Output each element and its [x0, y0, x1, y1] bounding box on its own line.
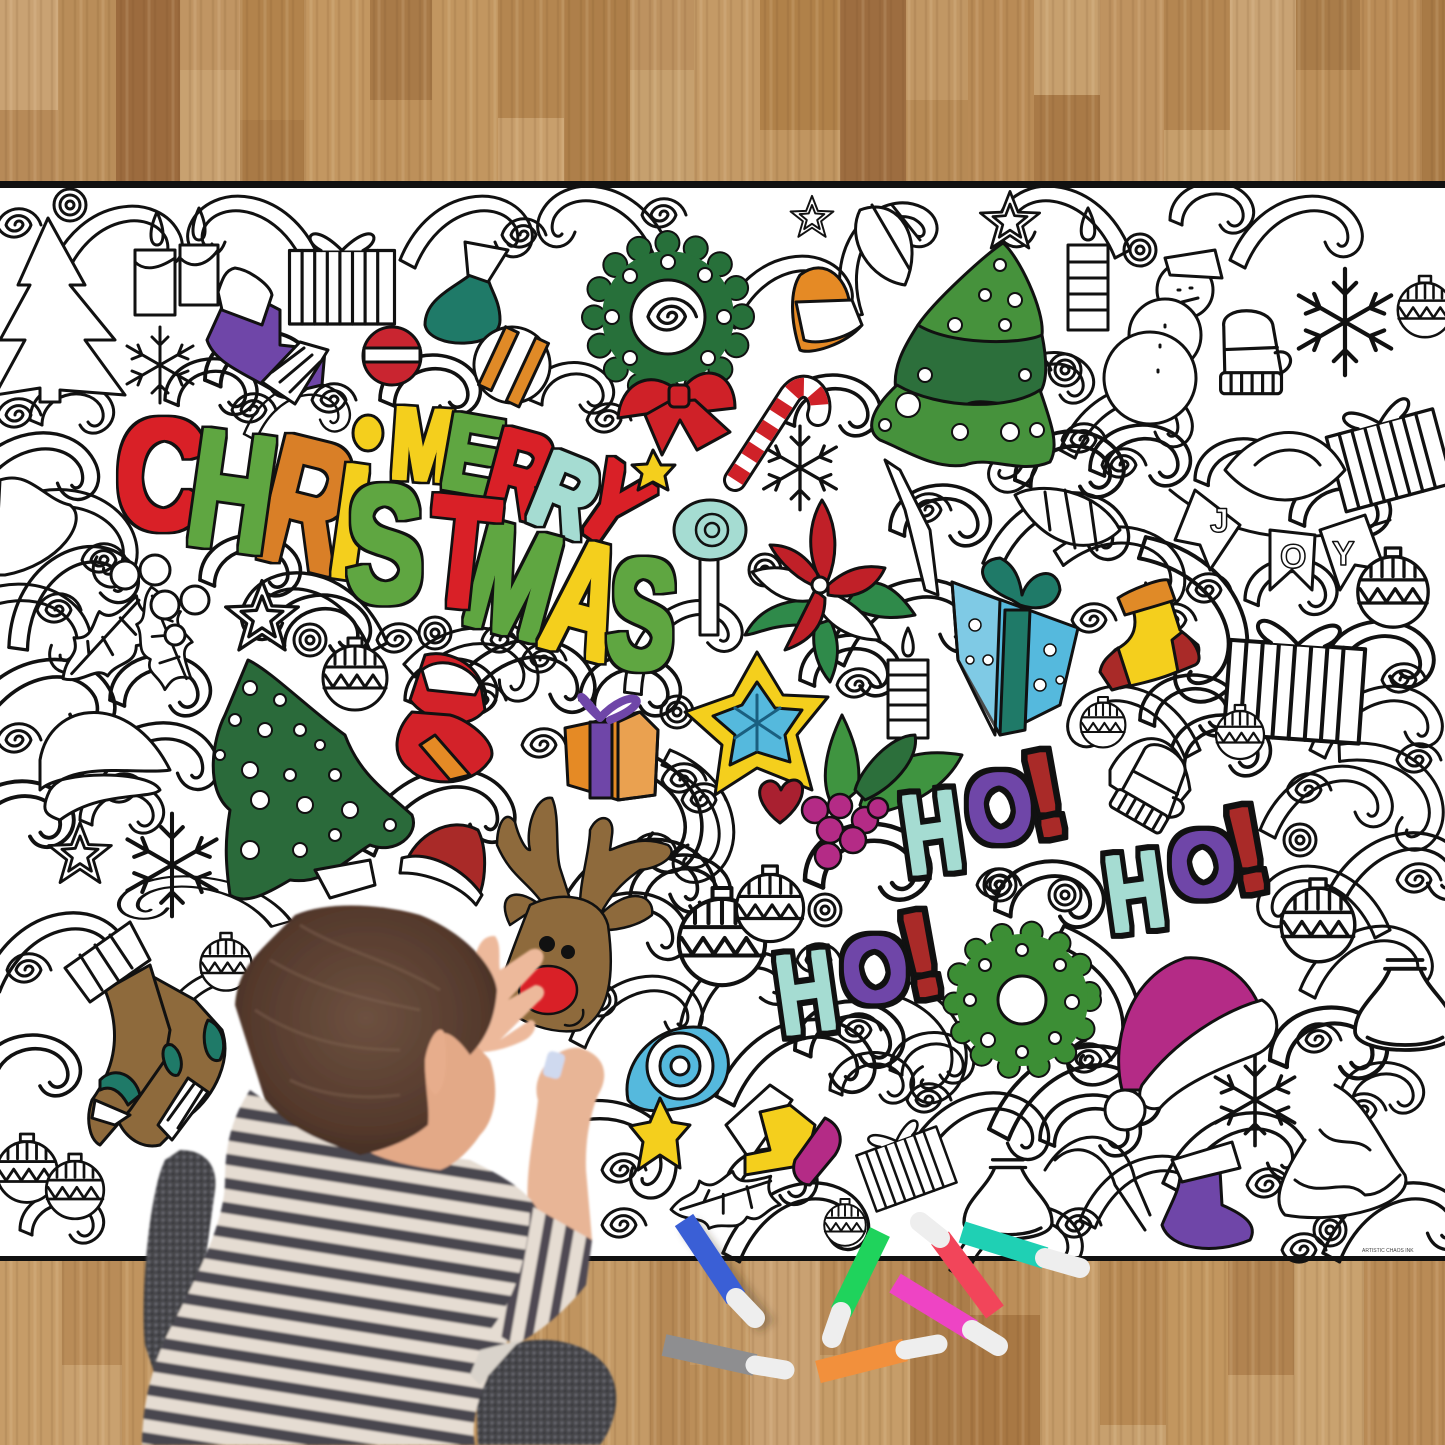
icon: ornament right: [1358, 548, 1428, 627]
right hand and arm: [527, 1048, 604, 1240]
icon: outline gift bottom: [852, 1114, 957, 1211]
title: Merry Christmas lettering: [111, 386, 683, 704]
icon: white mitten under tree: [315, 860, 375, 898]
markers group: [664, 1220, 1080, 1372]
icon: teal gift: [952, 558, 1078, 735]
word: CHRISTMAS: H: [178, 395, 286, 589]
lettering: HO centre: [894, 725, 1078, 900]
icon: poinsettia: [745, 500, 915, 682]
icon: outline gift mid right: [1224, 619, 1367, 744]
icon: yellow blue star: [685, 652, 828, 795]
icon: bag: [964, 1160, 1052, 1239]
credit line: ARTISTIC CHAOS INK: [1362, 1248, 1414, 1254]
marker: teal: [962, 1232, 1080, 1268]
word: MERRY: Y: [555, 441, 668, 569]
icon: magenta santa hat: [1105, 958, 1277, 1130]
icon: red heart: [760, 780, 803, 823]
lettering: HO right: !: [1213, 780, 1280, 919]
word: MERRY: R: [475, 405, 565, 546]
neck and face: [340, 1027, 495, 1170]
icon: star top: [791, 196, 833, 237]
hair strands: [255, 925, 440, 1097]
icon: outline gift right: [1322, 392, 1445, 512]
icon: santa hat outline: [40, 712, 170, 820]
icon: candy cane outline: [1045, 1137, 1150, 1230]
marker in hand: [542, 1050, 566, 1080]
icon: red mittens: [397, 654, 492, 782]
icon: candy cane: [735, 387, 819, 480]
icon: green tree top: [872, 243, 1054, 467]
lettering: HO centre: O: [960, 750, 1040, 866]
poster sheet: [0, 181, 1445, 1261]
shirt sleeve: [490, 1205, 592, 1345]
word: CHRISTMAS: S: [347, 453, 423, 637]
icon: outline tree: [1279, 1085, 1406, 1218]
lettering: HO bottom: !: [887, 885, 954, 1024]
shirt torso: [142, 1090, 540, 1445]
undershirt patch: [470, 1340, 520, 1385]
icon: snowflake: [127, 814, 217, 916]
icon: ornament top right: [1398, 276, 1445, 337]
icon: purple stocking: [1162, 1142, 1252, 1248]
icon: orange gift: [565, 697, 658, 800]
word: CHRISTMAS: I: [321, 430, 379, 612]
icon: holly vertical: [133, 584, 196, 692]
icon: yellow star bottom: [630, 1098, 690, 1170]
lettering: HO bottom: [768, 885, 954, 1060]
icon: holly and berries: [802, 715, 962, 869]
banner letter Y: Y: [1332, 535, 1355, 573]
marker: pink: [895, 1283, 998, 1346]
icon: snowflake bottom: [1215, 1054, 1295, 1146]
word: HO HO HO lettering: [768, 725, 1280, 1060]
icon: outline pine tree: [0, 218, 125, 402]
icon: shell: [1015, 488, 1120, 550]
icon: holly left: [43, 587, 173, 696]
word: CHRISTMAS: A: [529, 504, 642, 694]
icon: star top right: [980, 191, 1040, 248]
marker: green: [832, 1232, 880, 1338]
banner text: J: [1210, 502, 1229, 540]
icon: red bow: [618, 373, 735, 455]
icon: orange bell: [792, 268, 862, 351]
icon: heart cookie: [0, 478, 76, 575]
word: CHRISTMAS: R: [243, 397, 372, 611]
icon: outline star: [226, 581, 298, 650]
word: MERRY: R: [516, 429, 615, 560]
icon: ornament mitten: [200, 933, 252, 991]
lettering: HO right: [1098, 780, 1280, 957]
icon: yellow stocking: [1100, 580, 1199, 690]
icon: ornament bottom middle: [679, 888, 765, 985]
icon: star left: [49, 823, 111, 883]
icon: rocket outline: [885, 460, 938, 595]
banner letter O: O: [1280, 538, 1306, 576]
left hand fingers: [470, 936, 544, 1052]
icon: ornament centre left: [323, 638, 387, 710]
icon: ornament upper: [736, 866, 804, 942]
lettering: HO centre: H: [894, 764, 969, 900]
icon: lollipop: [674, 500, 746, 635]
icon: lips shape: [1225, 432, 1345, 500]
icon: yellow mitten: [726, 1085, 840, 1185]
bottom wood planks: [0, 1255, 1445, 1445]
icon: brown socks: [65, 922, 225, 1146]
icon: holly bottom: [671, 1172, 780, 1228]
icon: reindeer: [495, 798, 672, 1031]
icon: snowflake left: [127, 327, 193, 403]
icon: dark green tree left: [213, 660, 414, 899]
icon: berries: [111, 555, 209, 645]
top wood planks: [0, 0, 1445, 185]
icon: outline gift top: [290, 234, 394, 324]
icon: ornament 1240: [1216, 705, 1264, 759]
icon: yellow star: [632, 450, 675, 490]
word: CHRISTMAS: S: [601, 525, 683, 704]
word: MERRY: [353, 386, 668, 569]
hair: [235, 906, 497, 1155]
word: CHRISTMAS: [111, 386, 683, 704]
icon: outline bag right: [1355, 960, 1445, 1050]
icon: joy banner: [1170, 490, 1390, 590]
line-art doodle field: [0, 183, 1445, 1278]
word: CHRISTMAS: C: [111, 386, 211, 563]
icon: candle middle: [888, 628, 928, 738]
icon: teal bag: [425, 242, 508, 343]
icon: ornament bottom: [824, 1199, 866, 1246]
word: CHRISTMAS: M: [451, 491, 575, 674]
icon: striped hat top: [856, 205, 920, 285]
icon: outline mitten right: [1221, 311, 1291, 394]
icon: tree scallops: [1295, 1130, 1400, 1195]
icon: red santa hat: [400, 825, 485, 905]
coloured icons: [65, 242, 1280, 1248]
left knee in grey trousers: [144, 1150, 215, 1375]
icon: ornament right side: [1281, 879, 1355, 962]
marker: orange: [818, 1344, 938, 1372]
ear: [425, 1030, 446, 1095]
icon: red ornament: [363, 327, 421, 385]
icon: orange ornament: [462, 315, 562, 415]
marker: grey: [664, 1345, 785, 1370]
child colouring: [142, 906, 616, 1445]
icon: snowman: [1104, 250, 1222, 424]
icon: dark green wreath: [594, 243, 742, 391]
lettering: HO right: H: [1098, 828, 1172, 957]
icon: outline mitten left: [1109, 737, 1206, 839]
uncoloured line-art icons: [0, 191, 1445, 1246]
icon: green wreath bottom: [954, 932, 1090, 1068]
lettering: HO bottom: H: [768, 924, 843, 1060]
icon: candles: [135, 208, 218, 315]
word: CHRISTMAS: T: [421, 463, 505, 642]
word: MERRY: E: [435, 393, 511, 518]
icon: snowburst middle: [764, 426, 836, 510]
marker: blue: [684, 1220, 767, 1327]
icon: starburst right: [1299, 269, 1391, 375]
icon: outline hat right: [1110, 739, 1190, 820]
word: MERRY: M: [388, 386, 458, 503]
icon: blue spiral lollipop: [627, 1027, 728, 1111]
icon: purple sock: [207, 268, 328, 404]
lettering: HO bottom: O: [835, 914, 915, 1025]
marker: coral: [920, 1222, 995, 1312]
right knee in grey trousers: [475, 1340, 616, 1445]
icon: candle column: [1068, 208, 1108, 330]
lettering: HO right: O: [1163, 809, 1243, 920]
lettering: HO centre: !: [1011, 725, 1078, 864]
icon: ornament pair left: [0, 1134, 104, 1219]
icon: ornament 1105: [1081, 697, 1125, 747]
